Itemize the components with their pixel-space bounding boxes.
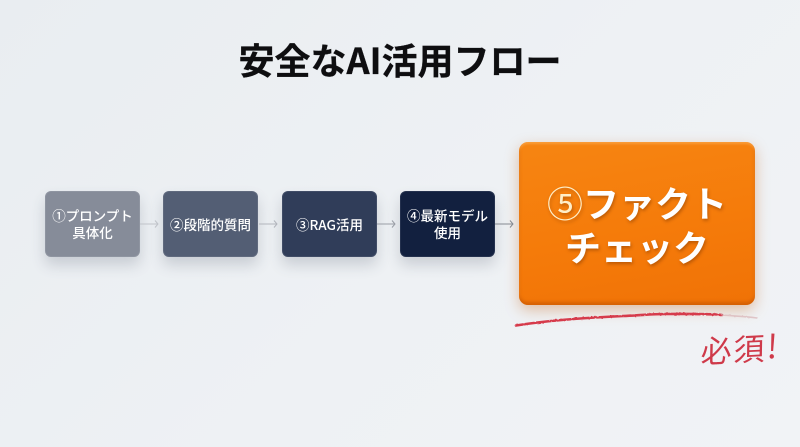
step 4 box bbox=[400, 191, 495, 257]
step 2 box bbox=[163, 191, 258, 257]
step 3 box bbox=[282, 191, 377, 257]
handwritten note: 必須 bbox=[700, 323, 767, 372]
step 5 highlighted box bbox=[519, 142, 755, 305]
step 5 highlighted box: ⑤ファクト bbox=[547, 176, 727, 228]
arrow 1 to 2 bbox=[140, 220, 158, 228]
red hand-drawn underline bbox=[516, 314, 757, 326]
step 1 box: ①プロンプト bbox=[52, 205, 133, 225]
step 3 box: ③RAG活用 bbox=[296, 214, 363, 234]
arrow 2 to 3 bbox=[259, 220, 277, 228]
arrow 3 to 4 bbox=[377, 220, 395, 228]
step 1 box: 具体化 bbox=[72, 222, 113, 242]
step 1 box bbox=[45, 191, 140, 257]
arrow 4 to 5 bbox=[495, 220, 513, 228]
title: 安全なAI活用フロー bbox=[239, 33, 561, 85]
step 2 box: ②段階的質問 bbox=[170, 214, 251, 234]
step 4 box: 使用 bbox=[434, 222, 461, 242]
step 5 highlighted box: チェック bbox=[565, 220, 709, 272]
handwritten note: ! bbox=[766, 320, 779, 368]
step 4 box: ④最新モデル bbox=[407, 205, 488, 225]
